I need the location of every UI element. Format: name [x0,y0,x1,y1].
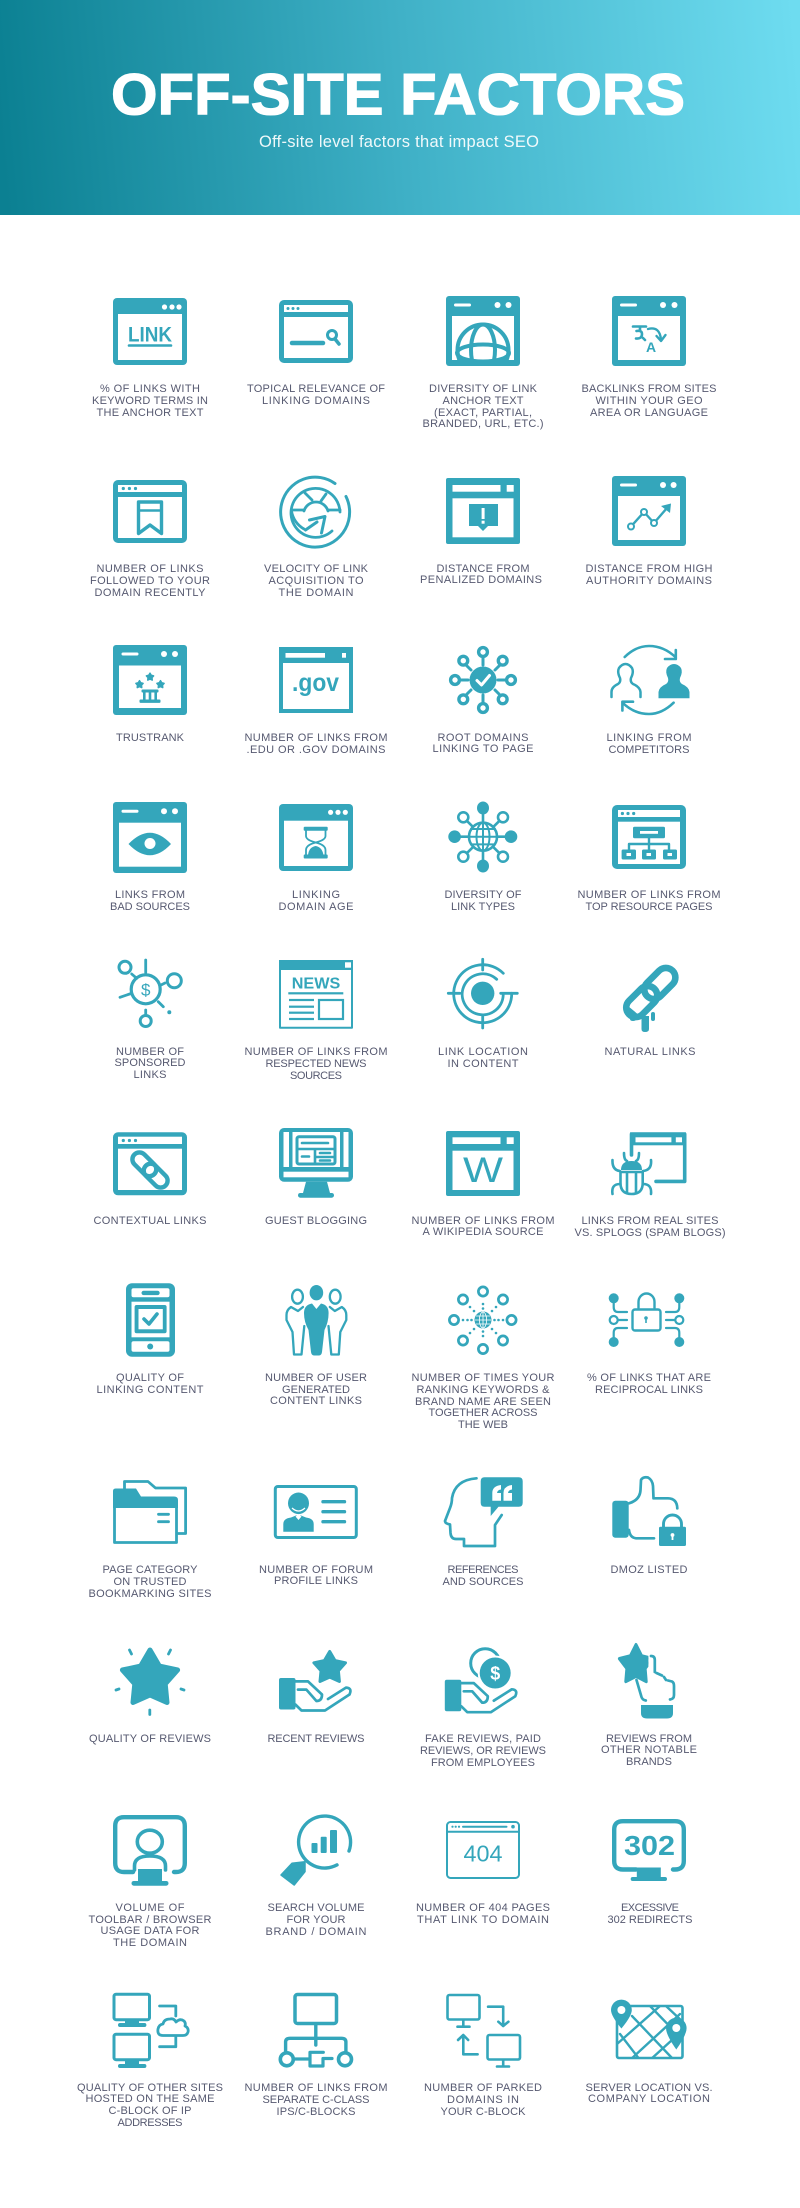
label: ANCHOR TEXT [442,395,524,407]
icon: three people [286,1285,346,1356]
icon: eye window [113,802,187,873]
label [114,1046,186,1081]
label [92,383,208,419]
item: dmoz listed [610,1477,688,1576]
header banner [0,0,800,215]
label: PENALIZED DOMAINS [420,574,542,586]
label: ROOT DOMAINS [438,732,528,744]
label [77,2082,223,2129]
label: RECIPROCAL LINKS [595,1384,703,1396]
label: IPS/C-BLOCKS [276,2106,356,2118]
label: VELOCITY OF LINK [264,563,369,575]
label: THE DOMAIN [278,587,354,599]
icon: search window [279,300,353,363]
label: LINKING DOMAINS [262,395,370,407]
label: NUMBER OF [116,1046,184,1058]
label: C-BLOCK OF IP [108,2105,192,2117]
label: QUALITY OF [116,1372,184,1384]
icon: hand with star [279,1651,350,1710]
icon: link window: LINK [128,324,172,346]
icon: chain window [113,1132,187,1195]
label [247,383,385,407]
label: LINKING CONTENT [96,1384,204,1396]
label: LINKS FROM [115,889,185,901]
icon: globe window [446,296,520,366]
item: reciprocal links [587,1293,711,1396]
icon: speed gauge [281,477,350,547]
label [438,1046,528,1070]
label: TOGETHER ACROSS [428,1407,538,1419]
label: QUALITY OF REVIEWS [89,1733,211,1745]
label: LINKING FROM [606,732,692,744]
label: LINKS [134,1069,166,1081]
label: THE WEB [458,1419,508,1431]
label [422,383,544,430]
item: top resource pages [578,805,720,913]
label: DOMAINS IN [447,2094,519,2106]
item: forum profile links [259,1486,373,1587]
item: wikipedia source [412,1131,554,1238]
icon: network diagram [280,1994,352,2066]
label: NUMBER OF USER [265,1372,367,1384]
label: NUMBER OF LINKS FROM [244,1046,388,1058]
item: domain age [278,804,354,913]
item: quality of reviews [89,1650,211,1745]
label: DMOZ LISTED [610,1564,688,1576]
icon: phone with check [126,1283,175,1357]
label: BACKLINKS FROM SITES [582,383,716,395]
label: NUMBER OF TIMES YOUR [412,1372,555,1384]
icon: finger tapping star [619,1645,674,1718]
label: NUMBER OF 404 PAGES [416,1902,550,1914]
icon: alert window [446,478,520,544]
label [574,1215,726,1239]
label: DIVERSITY OF LINK [429,383,538,395]
icon: dollar network: $ [141,980,151,1000]
label: HOSTED ON THE SAME [86,2093,214,2105]
label: PAGE CATEGORY [102,1564,198,1576]
label: FROM EMPLOYEES [431,1757,535,1769]
item: server location [586,2000,712,2105]
label: YOUR C-BLOCK [440,2106,526,2118]
item: root domains [432,648,534,755]
icon: globe network [448,802,517,872]
label [578,889,720,913]
label: PROFILE LINKS [274,1575,358,1587]
label: TRUSTRANK [116,732,185,744]
icon: padlock with circuits [609,1293,684,1347]
label [606,732,692,756]
label: COMPETITORS [608,744,690,756]
icon: profile card [275,1486,356,1538]
item: 302 redirects [608,1821,692,1926]
label: SOURCES [290,1070,342,1082]
icon: dripping chain [622,964,679,1032]
label [412,1372,555,1431]
item: high authority domains [586,476,713,587]
label: DOMAIN RECENTLY [94,587,206,599]
item: guest blogging [265,1128,367,1227]
item: separate c-class [244,1994,388,2118]
label: SERVER LOCATION VS. [586,2082,712,2094]
label: BRANDS [626,1756,672,1768]
icon: shining star [116,1650,184,1714]
label: LINKING TO PAGE [432,743,534,755]
icon: wikipedia window: W [463,1151,503,1190]
label [587,1372,711,1396]
label [444,889,522,913]
item: % of links with keyword terms [92,298,208,419]
item: natural links [604,964,696,1058]
item: 404 pages [416,1822,550,1926]
label [265,1372,367,1407]
label: TOP RESOURCE PAGES [586,901,712,913]
label: GENERATED [282,1384,350,1396]
item: trustrank [113,645,187,744]
item: backlinks geo [582,296,716,419]
label: THE ANCHOR TEXT [96,407,204,419]
label: LINK TYPES [451,901,515,913]
icon: .gov window [279,647,353,713]
item: contextual links [94,1132,206,1227]
label: AND SOURCES [442,1576,524,1588]
label: SEARCH VOLUME [268,1902,364,1914]
icon: map with pins [611,2000,687,2060]
item: recent reviews [268,1651,364,1745]
label: COMPANY LOCATION [588,2093,710,2105]
item: bookmarking sites [88,1482,212,1600]
label: DISTANCE FROM HIGH [586,563,713,575]
icon: head with quote bubble [445,1477,523,1546]
icon: bug and window [612,1132,686,1197]
label [420,1733,546,1769]
label: NUMBER OF LINKS FROM [412,1215,554,1227]
icon: magnifier with bars and tag [281,1816,351,1885]
label: BRAND NAME ARE SEEN [415,1396,551,1408]
label: % OF LINKS THAT ARE [587,1372,711,1384]
label: % OF LINKS WITH [100,383,200,395]
label: NUMBER OF PARKED [424,2082,542,2094]
item: other sites same c-block [77,1994,223,2129]
item: velocity [264,477,369,599]
item: topical relevance [247,300,385,407]
item: diversity of anchor text [422,296,544,430]
label: CONTENT LINKS [270,1395,362,1407]
label [96,1372,204,1396]
item: ranking keywords [412,1287,555,1431]
label: BRANDED, URL, ETC.) [422,418,544,430]
item: references and sources [442,1477,524,1588]
label: OTHER NOTABLE [601,1744,697,1756]
item: toolbar usage data [88,1817,212,1949]
label: LINK LOCATION [438,1046,528,1058]
label [442,1564,524,1588]
subtitle: Off-site level factors that impact SEO [259,133,539,151]
label: DISTANCE FROM [436,563,530,575]
label [420,563,542,586]
icon: 404 window: 404 [464,1841,503,1867]
label: REVIEWS, OR REVIEWS [420,1745,546,1757]
label [416,1902,550,1926]
icon: hand with coins: $ [490,1664,500,1684]
label: THE DOMAIN [113,1937,187,1949]
label [244,2082,388,2118]
item: user generated content [265,1285,367,1407]
icon: news page [279,960,353,1028]
item: link location [438,959,528,1070]
label [586,563,713,587]
label: VOLUME OF [116,1902,185,1914]
label [244,732,388,756]
item: bad sources [110,802,190,913]
label: IN CONTENT [448,1058,519,1070]
label: USAGE DATA FOR [100,1925,200,1937]
label: QUALITY OF OTHER SITES [77,2082,223,2094]
label [278,889,354,913]
label: RECENT REVIEWS [268,1733,364,1745]
label: RANKING KEYWORDS & [416,1384,550,1396]
icon: wikipedia window [446,1131,520,1196]
label: KEYWORD TERMS IN [92,395,208,407]
label [601,1733,697,1768]
item: news sources [244,960,388,1082]
icon: 302 monitor: 302 [624,1830,675,1861]
label: (EXACT, PARTIAL, [434,407,532,419]
label: NUMBER OF LINKS [96,563,204,575]
icon: line chart window [612,476,686,546]
label: DOMAIN AGE [278,901,354,913]
label: NUMBER OF FORUM [259,1564,373,1576]
label: FOR YOUR [286,1914,346,1926]
label: BRAND / DOMAIN [266,1926,367,1938]
label: NATURAL LINKS [604,1046,696,1058]
label: ADDRESSES [118,2117,182,2129]
label: TOOLBAR / BROWSER [88,1914,212,1926]
label: FOLLOWED TO YOUR [90,575,210,587]
item: edu gov links [244,647,388,756]
label [110,889,190,913]
item: competitors [606,646,692,756]
label: ON TRUSTED [114,1576,187,1588]
label: NUMBER OF LINKS FROM [244,732,388,744]
icon: translate window: A [646,339,656,355]
label: AUTHORITY DOMAINS [586,575,712,587]
item: search volume [266,1816,367,1938]
label [432,732,534,755]
label: LINKING [292,889,340,901]
label [412,1215,554,1238]
label: LINKS FROM REAL SITES [582,1215,718,1227]
label: RESPECTED NEWS [266,1058,366,1070]
label: VS. SPLOGS (SPAM BLOGS) [574,1227,726,1239]
label: NUMBER OF LINKS FROM [578,889,720,901]
item: fake reviews [420,1649,546,1769]
item: quality of linking content [96,1283,204,1396]
icon: thumbs up with lock [612,1477,686,1546]
label: SPONSORED [114,1057,186,1069]
label: ACQUISITION TO [268,575,364,587]
item: diversity of link types [444,802,522,913]
label: .EDU OR .GOV DOMAINS [246,744,386,756]
label: A WIKIPEDIA SOURCE [422,1226,544,1238]
icon: target [448,959,517,1028]
label: AREA OR LANGUAGE [590,407,708,419]
label: DIVERSITY OF [444,889,522,901]
label: BOOKMARKING SITES [88,1588,212,1600]
icon: folders [113,1482,186,1542]
label: BAD SOURCES [110,901,190,913]
label: WITHIN YOUR GEO [596,395,703,407]
icon: swapping monitors [448,1995,520,2066]
icon: two people with cycle arrows [612,646,690,714]
title: OFF-SITE FACTORS [111,62,685,128]
icon: monitor with article [279,1128,353,1198]
label: CONTEXTUAL LINKS [94,1215,206,1227]
label: THAT LINK TO DOMAIN [417,1914,549,1926]
label [244,1046,388,1082]
icon: globe with dotted network [449,1287,516,1354]
icon: .gov window: .gov [292,669,339,697]
label: SEPARATE C-CLASS [262,2094,370,2106]
label [259,1564,373,1587]
label: GUEST BLOGGING [265,1215,367,1227]
item: penalized domains [420,478,542,586]
label [582,383,716,419]
label: NUMBER OF LINKS FROM [244,2082,388,2094]
icon: check hub network [451,648,515,712]
label: TOPICAL RELEVANCE OF [247,383,385,395]
icon: sitemap window [612,805,686,869]
label: REVIEWS FROM [606,1733,692,1745]
icon: monitors and cloud [114,1994,188,2068]
label [266,1902,367,1938]
label: EXCESSIVE [621,1902,679,1914]
icon: hourglass window [279,804,353,871]
label: REFERENCES [448,1564,518,1576]
label [424,2082,542,2118]
icon: bookmark window [113,480,187,543]
item: sponsored links [114,960,186,1081]
label [264,563,369,599]
item: notable brands [601,1645,697,1768]
label [608,1902,692,1926]
label: 302 REDIRECTS [608,1914,692,1926]
label [586,2082,712,2105]
label: FAKE REVIEWS, PAID [425,1733,541,1745]
item: links followed recently [90,480,210,599]
label [88,1564,212,1600]
icon: news page: NEWS [292,975,340,992]
icon: trust building with stars [113,645,187,715]
label [88,1902,212,1949]
item: real sites vs splogs [574,1132,726,1239]
item: parked domains [424,1995,542,2118]
label [90,563,210,599]
icon: monitor with user [115,1817,185,1886]
